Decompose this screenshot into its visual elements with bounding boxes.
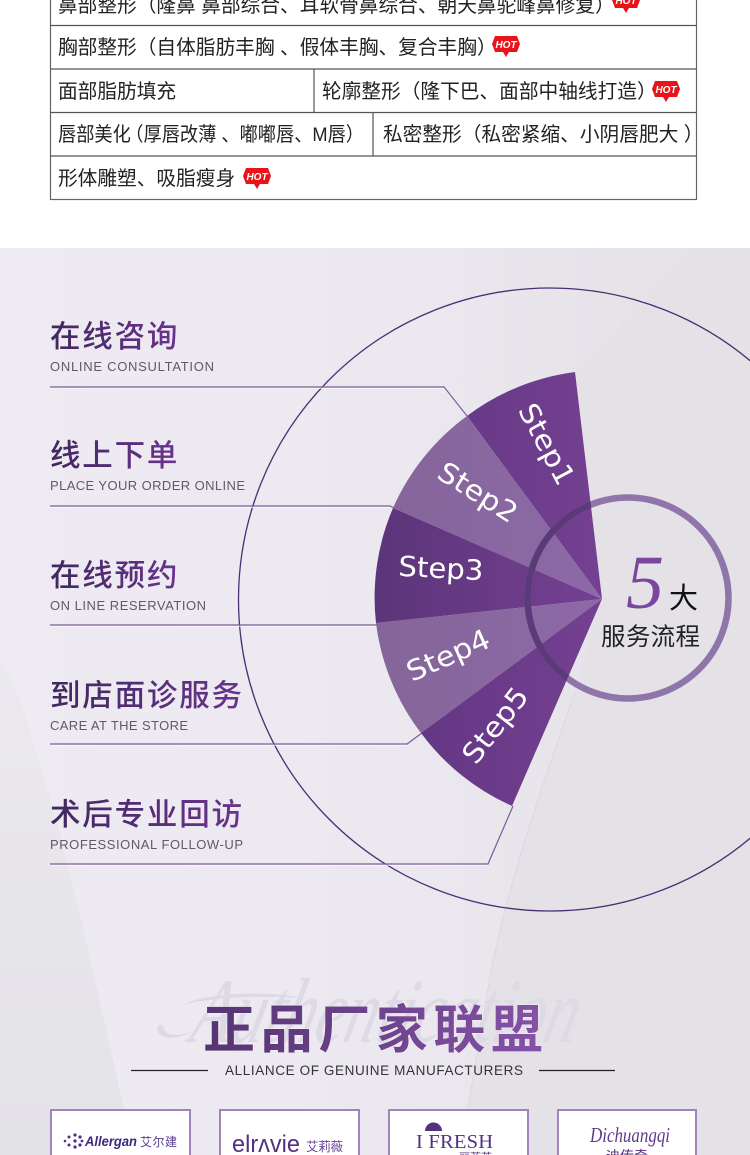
- step item: reservation: ON LINE RESERVATION: [50, 598, 206, 613]
- segment: step 1: Step1: [511, 398, 582, 491]
- icon: hot badge contour: HOT: [655, 85, 677, 96]
- watermark script: [157, 961, 593, 1063]
- title: genuine manufacturers alliance: 正品厂家联盟: [203, 1002, 543, 1060]
- row: chest: 胸部整形（自体脂肪丰胸 、假体丰胸、复合丰胸）: [58, 37, 497, 59]
- step item: order online: [50, 439, 394, 508]
- center label: 5 major service flow: 服务流程: [601, 623, 700, 651]
- step item: follow up: [50, 798, 513, 865]
- large outline circle: [238, 288, 750, 911]
- icon: hot badge body: HOT: [246, 172, 268, 183]
- cell: private: 私密整形（私密紧缩、小阴唇肥大 ）: [383, 124, 703, 146]
- segment: step 5: [421, 599, 602, 806]
- fan chart: steps: [375, 372, 602, 806]
- segment: step 1: [467, 372, 602, 599]
- ring: inner circle: [528, 498, 728, 698]
- step item: online consultation: ONLINE CONSULTATION: [50, 359, 214, 374]
- logo card: I Fresh: I FRESH: [416, 1131, 493, 1153]
- step item: reservation: 在线预约: [50, 559, 179, 593]
- step item: reservation: [50, 559, 377, 626]
- segment: step 4: [376, 599, 602, 733]
- step item: online consultation: 在线咨询: [50, 320, 179, 354]
- logo card: elravie: [220, 1110, 359, 1155]
- icon: hot badge chest: [492, 36, 520, 57]
- logo card: Dichuangqi: Dichuangqi: [589, 1123, 670, 1147]
- step item: follow up: PROFESSIONAL FOLLOW-UP: [50, 837, 243, 852]
- logo card: Allergan: 艾尔建: [140, 1134, 177, 1149]
- list: five service steps: [50, 320, 513, 865]
- icon: hot badge chest: HOT: [495, 40, 517, 51]
- segment: step 5: Step5: [455, 680, 535, 770]
- logo card: Allergan: [51, 1110, 190, 1155]
- icon: hot badge contour: [652, 81, 680, 102]
- logo card: Dichuangqi: [558, 1110, 696, 1155]
- background panel: [0, 248, 750, 1155]
- segment: step 3: Step3: [398, 550, 484, 587]
- icon: hot badge body: [243, 168, 271, 189]
- cell: fat filling: 面部脂肪填充: [58, 81, 176, 103]
- center label: 5 major service flow: 5: [626, 541, 664, 625]
- center label: 5 major service flow: [601, 541, 700, 651]
- step item: online consultation: [50, 320, 467, 417]
- segment: step 3: [375, 508, 602, 623]
- row: body: 形体雕塑、吸脂瘦身: [58, 168, 235, 190]
- logo card: I Fresh: [389, 1110, 528, 1155]
- watermark script: Authentication: [179, 961, 593, 1063]
- logo card: Allergan: Allergan: [84, 1133, 137, 1149]
- segment: step 4: Step4: [401, 622, 495, 688]
- cell: contour: 轮廓整形（隆下巴、面部中轴线打造）: [322, 81, 657, 103]
- step item: order online: PLACE YOUR ORDER ONLINE: [50, 478, 245, 493]
- step item: in store service: [50, 679, 422, 745]
- icon: hot badge nose: [612, 0, 640, 13]
- segment: step 2: Step2: [432, 455, 524, 530]
- step item: in store service: 到店面诊服务: [50, 679, 244, 713]
- table: surgery categories: [50, 0, 703, 200]
- center label: 5 major service flow: 大: [669, 582, 698, 615]
- step item: in store service: CARE AT THE STORE: [50, 718, 188, 733]
- logo card: elravie: 艾莉薇: [306, 1140, 343, 1154]
- subtitle with rules: ALLIANCE OF GENUINE MANUFACTURERS: [225, 1063, 523, 1078]
- logo row: [51, 1110, 696, 1155]
- step item: order online: 线上下单: [50, 439, 179, 473]
- step item: follow up: 术后专业回访: [50, 798, 244, 832]
- segment: step 2: [393, 416, 602, 599]
- cell: lips: 唇部美化（厚唇改薄 、嘟嘟唇、M唇）: [58, 124, 364, 146]
